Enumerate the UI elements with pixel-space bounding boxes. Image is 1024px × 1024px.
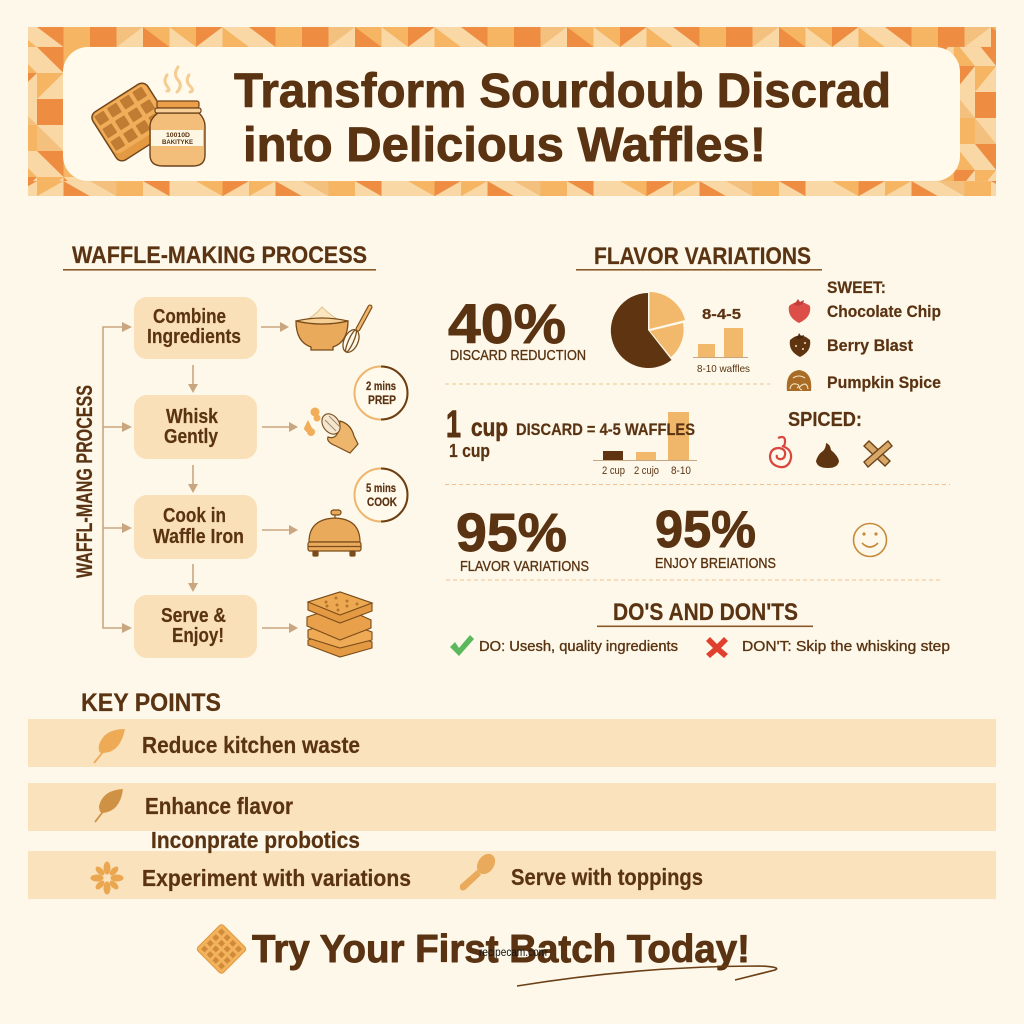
stat: 1 cup discard: 1 [446, 404, 461, 446]
icon: chocolate berry [790, 333, 810, 357]
small bar chart: 8-4-5: 8-10 waffles [697, 363, 750, 375]
connector tree [103, 327, 292, 628]
banner inner panel [63, 47, 960, 181]
step: whisk gently: Gently [164, 426, 219, 448]
icon: chocolate chip [816, 443, 839, 468]
flavor name: chocolate chip: Chocolate Chip [827, 302, 941, 321]
text: experiment with variations: Experiment with variations [142, 865, 411, 891]
icon: stacked waffles [307, 592, 372, 657]
step: cook in waffle iron: Waffle Iron [153, 526, 244, 548]
panel: spiced flavors: SPICED: [788, 409, 862, 431]
step: combine ingredients: Combine [153, 306, 226, 328]
banner geometric border [28, 27, 996, 196]
heading: flavor variations: FLAVOR VARIATIONS [594, 243, 811, 270]
timer: 5 mins cook [354, 468, 408, 522]
stat: 1 cup discard: 1 cup [449, 441, 490, 461]
band: enhance flavor: Enhance flavor [145, 793, 293, 819]
icon: sourdough jar [150, 101, 205, 166]
step: combine ingredients: Ingredients [147, 326, 241, 348]
step: serve and enjoy [134, 595, 257, 658]
divider lines [445, 384, 950, 580]
panel: sweet flavors: SWEET: [827, 278, 886, 297]
band: experiment and serve [28, 851, 996, 899]
banner [28, 27, 996, 196]
icon: waffle diamond [196, 924, 247, 974]
label: inconprate probotics: Inconprate probotics [151, 827, 360, 853]
bar chart: cups to waffles: 8-10 [671, 465, 691, 477]
band: reduce kitchen waste [28, 719, 996, 767]
vertical label: WAFFL-MANG PROCESS [72, 385, 97, 578]
step: combine ingredients [134, 297, 257, 359]
heading: waffle-making process: WAFFLE-MAKING PROCESS [72, 242, 367, 269]
icon: flower [90, 862, 124, 894]
small bar chart: 8-4-5: 8-4-5 [702, 306, 741, 323]
step: whisk gently [134, 395, 257, 459]
heading: key points: KEY POINTS [81, 689, 221, 717]
timer: 5 mins cook: COOK [367, 497, 398, 509]
call to action [196, 924, 777, 986]
icon: sourdough jar: BAKITYKE [162, 140, 193, 146]
panel: spiced flavors [770, 409, 892, 468]
title [234, 65, 891, 172]
timer: 5 mins cook: 5 mins [366, 483, 396, 495]
panel: process flow [72, 297, 408, 658]
stat: 1 cup discard: DISCARD = 4-5 WAFFLES [516, 420, 695, 439]
icon: hand whisking [304, 408, 358, 453]
stat: 40 percent discard reduction: 40% [448, 292, 566, 355]
icon: cross [706, 637, 728, 658]
stat: 95 percent enjoy: 95% [655, 501, 756, 559]
stat: 95 percent flavor variations [456, 503, 589, 575]
step: cook in waffle iron: Cook in [163, 505, 226, 527]
stat: 1 cup discard [446, 404, 695, 461]
bar chart: cups to waffles: 2 cujo [634, 465, 659, 477]
icon: pumpkin roll [787, 370, 811, 391]
band: reduce kitchen waste: Reduce kitchen waste [142, 732, 360, 758]
stat: 95 percent enjoy: ENJOY BREIATIONS [655, 555, 776, 572]
step: serve and enjoy: Enjoy! [172, 625, 224, 647]
step: whisk gently: Whisk [166, 406, 219, 428]
step: cook in waffle iron [134, 495, 257, 559]
do text: DO: Usesh, quality ingredients [479, 638, 678, 655]
icon: cinnamon sticks [864, 441, 892, 467]
pie chart [611, 292, 685, 368]
bar chart: cups to waffles [593, 412, 697, 477]
icon: steam [165, 67, 192, 92]
text: serve with toppings: Serve with toppings [511, 864, 703, 890]
stat: 95 percent flavor variations: FLAVOR VARIATIONS [460, 558, 589, 575]
title: into Delicious Waffles! [243, 119, 766, 172]
arrowheads [122, 322, 298, 633]
icon: waffle iron [308, 510, 361, 556]
timer: 2 mins prep [354, 366, 408, 420]
cta text: Try Your First Batch Today! [252, 928, 750, 971]
icon: check [450, 635, 474, 656]
step: serve and enjoy: Serve & [161, 605, 226, 627]
underline swoosh [517, 966, 777, 986]
icon: bowl and whisk [296, 307, 370, 355]
stat: 40 percent discard reduction: DISCARD REDUCTION [450, 347, 586, 364]
panel: key points bands [28, 719, 996, 899]
icon: waffle [89, 81, 175, 163]
flavor name: berry blast: Berry Blast [827, 336, 913, 355]
icon: spiral [770, 437, 791, 467]
icon: smiley [854, 524, 886, 556]
icon: strawberry [789, 299, 810, 323]
stat: 95 percent flavor variations: 95% [456, 503, 567, 563]
band: enhance flavor [28, 783, 996, 831]
panel: do's and don'ts [450, 599, 950, 658]
timer: 2 mins prep: 2 mins [366, 381, 396, 393]
panel: sweet flavors [787, 278, 941, 392]
watermark: recipecam.com [479, 947, 547, 959]
title: Transform Sourdoub Discrad [234, 65, 891, 118]
icon: sourdough jar: 10010D [166, 133, 191, 139]
don't text: DON'T: Skip the whisking step [742, 638, 950, 655]
icon: spoon [460, 850, 499, 890]
stat: 1 cup discard: cup [471, 414, 508, 442]
flavor name: pumpkin spice: Pumpkin Spice [827, 373, 941, 392]
timer: 2 mins prep: PREP [368, 395, 396, 407]
bar chart: cups to waffles: 2 cup [602, 465, 625, 477]
heading: DO'S AND DON'TS [613, 599, 798, 626]
small bar chart: 8-4-5 [693, 306, 750, 375]
